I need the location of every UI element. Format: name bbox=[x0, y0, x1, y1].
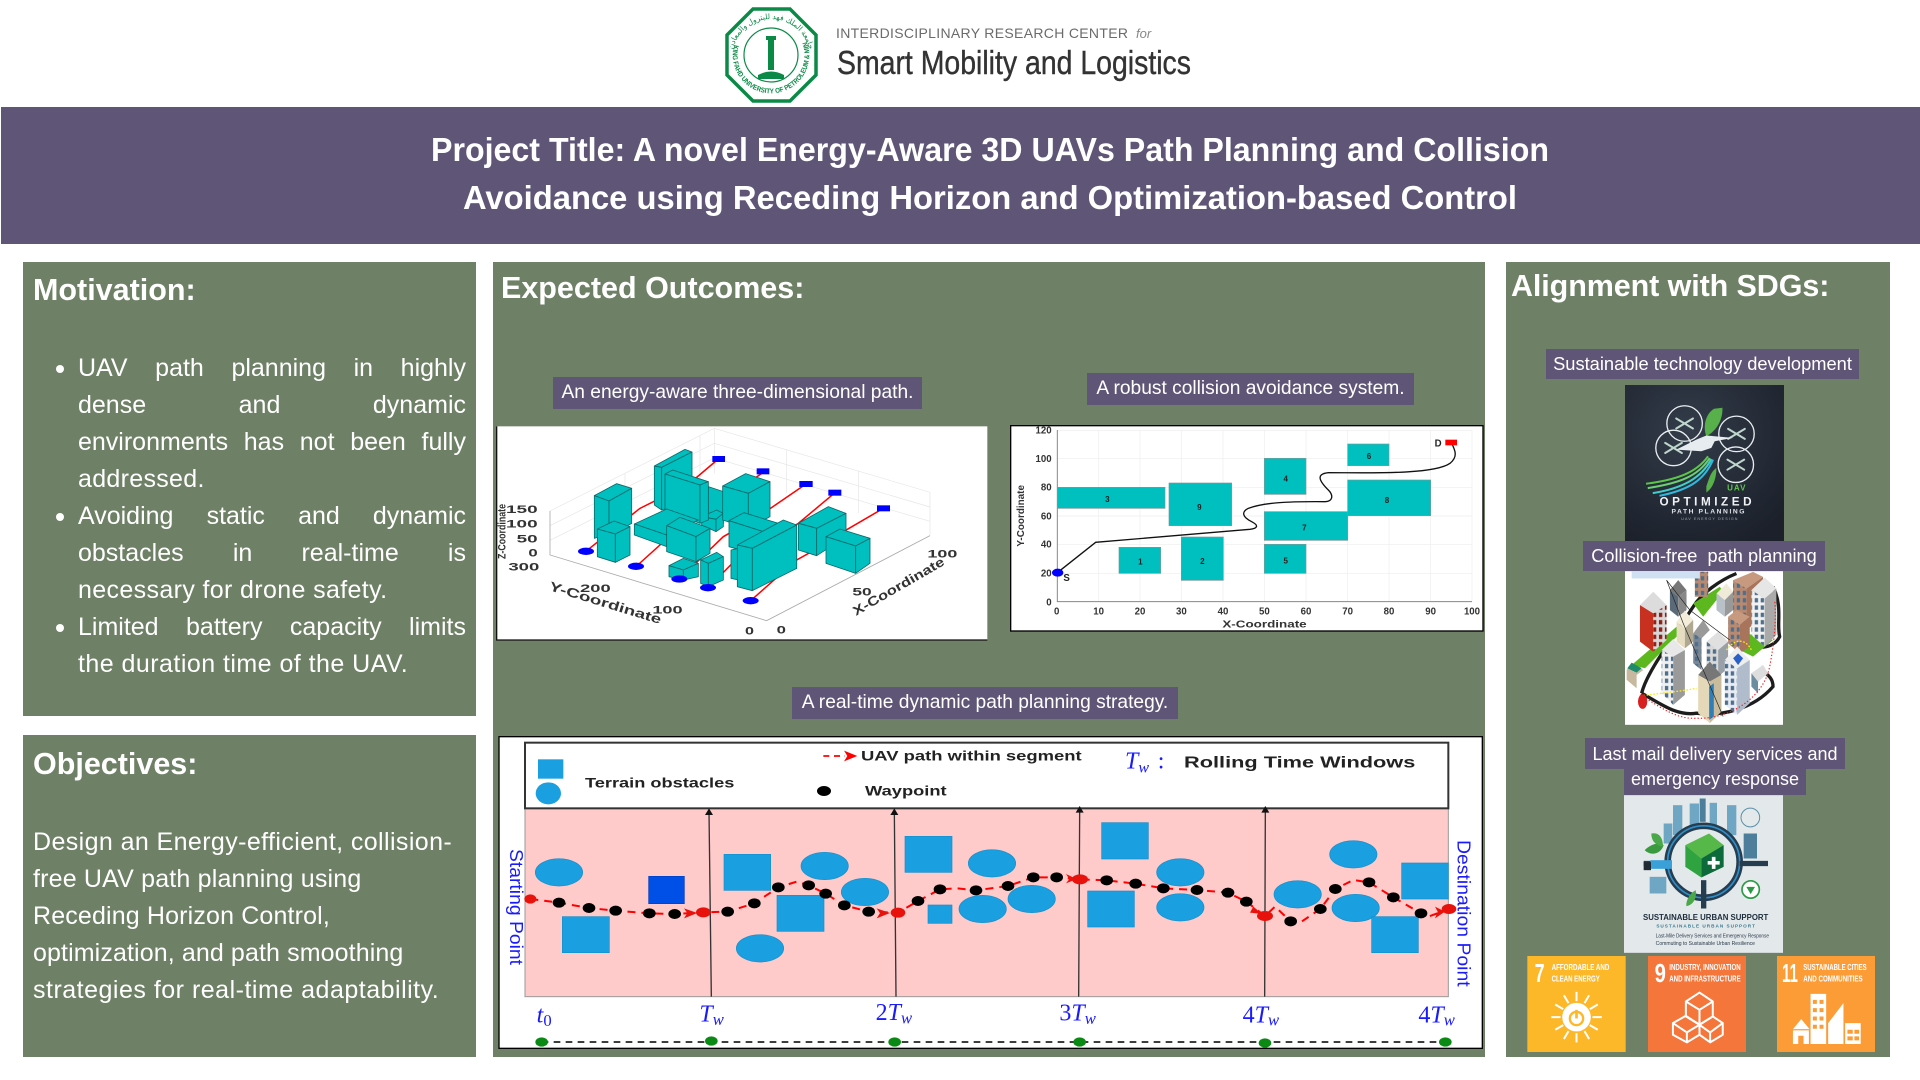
pink planning area bbox=[525, 808, 1448, 997]
bullet list: motivation: environments has not been fully bbox=[78, 428, 466, 456]
axis labels: 200 bbox=[580, 583, 611, 595]
SDG tile: 11 bbox=[1777, 956, 1875, 1052]
axis labels: 100 bbox=[506, 518, 538, 530]
panel: alignment with SDGs bbox=[1506, 262, 1890, 1057]
axis labels bbox=[496, 504, 957, 638]
bullet list: motivation: UAV path planning in highly bbox=[78, 354, 466, 382]
axis labels: 0 bbox=[777, 624, 786, 636]
image: drone logo: UAV ENERGY DESIGN bbox=[1681, 517, 1738, 521]
bullet list: motivation: obstacles in real-time is bbox=[78, 539, 466, 567]
chart: rolling time window strategy bbox=[498, 736, 1483, 1049]
chart: 2D collision avoidance: 9 bbox=[1197, 503, 1202, 512]
heading: expected outcomes: Expected Outcomes: bbox=[501, 271, 804, 305]
bullet list: motivation: the duration time of the UAV. bbox=[78, 650, 408, 678]
time labels: 4T bbox=[1243, 1002, 1268, 1028]
axis labels bbox=[1016, 426, 1480, 631]
time labels: w bbox=[901, 1008, 912, 1027]
axis labels: 100 bbox=[652, 604, 683, 616]
axis labels: Y-Coordinate bbox=[1016, 484, 1027, 547]
heading: SDGs: Alignment with SDGs: bbox=[1511, 269, 1829, 303]
axis labels: 20 bbox=[1041, 569, 1052, 580]
legend bbox=[525, 743, 1448, 808]
start marker bbox=[1052, 569, 1070, 584]
axis labels: 300 bbox=[508, 562, 539, 574]
axis labels: 80 bbox=[1041, 483, 1052, 494]
time labels: T bbox=[699, 1002, 713, 1028]
bullet list: motivation bbox=[56, 354, 466, 678]
UAV path bbox=[530, 877, 1449, 923]
chart: 2D collision avoidance: 5 bbox=[1283, 557, 1288, 566]
destination marker bbox=[1435, 438, 1457, 449]
image: city collision-free paths bbox=[1625, 571, 1783, 725]
chart: 2D collision avoidance: 8 bbox=[1385, 496, 1390, 505]
time labels: 3T bbox=[1059, 1001, 1085, 1027]
waypoints bbox=[553, 872, 1427, 926]
image: sustainable urban support logo: Last-Mile Delivery Services and Emergency Response bbox=[1656, 934, 1769, 940]
image: sustainable urban support logo bbox=[1624, 795, 1783, 953]
segment nodes bbox=[524, 874, 1456, 921]
pill: sustainable technology caption bbox=[1546, 349, 1859, 379]
text block: objectives: Receding Horizon Control, bbox=[33, 902, 330, 930]
time labels: 2T bbox=[876, 1000, 901, 1026]
axis labels: X-Coordinate bbox=[850, 554, 947, 619]
axis labels: 50 bbox=[852, 586, 872, 598]
time labels: 0 bbox=[543, 1011, 552, 1030]
text block: objectives bbox=[33, 828, 452, 1004]
legend: Terrain obstacles bbox=[585, 774, 735, 790]
logo: university seal bbox=[725, 7, 818, 103]
label: destination point: Destination Point bbox=[1453, 840, 1474, 988]
pill: energy-aware path caption: An energy-aware three-dimensional path. bbox=[562, 382, 913, 403]
axis labels: 0 bbox=[528, 548, 538, 560]
title banner: Avoidance using Receding Horizon and Optimization-based Control bbox=[463, 179, 1517, 216]
axis labels: 60 bbox=[1301, 607, 1311, 618]
axis labels: 50 bbox=[1259, 607, 1270, 618]
axis labels: X-Coordinate bbox=[1222, 620, 1308, 631]
chart: 2D collision avoidance: 2 bbox=[1200, 557, 1205, 566]
chart: 2D collision avoidance bbox=[1010, 425, 1484, 632]
bullet list: motivation: Limited battery capacity limits bbox=[78, 613, 466, 641]
axis labels: 100 bbox=[1464, 607, 1480, 618]
time labels: w bbox=[1085, 1009, 1096, 1028]
SDG tile: 7 bbox=[1527, 956, 1626, 1052]
SDG tile: 9: 9 bbox=[1655, 960, 1666, 988]
pill: sustainable technology caption: Sustainable technology development bbox=[1553, 353, 1852, 374]
image: drone logo: OPTIMIZED bbox=[1659, 496, 1752, 509]
start marker: S bbox=[1063, 573, 1070, 584]
chart: 2D collision avoidance: 7 bbox=[1302, 523, 1307, 532]
panel: expected outcomes bbox=[493, 262, 1485, 1057]
axis labels: 100 bbox=[927, 548, 957, 560]
chart: 2D collision avoidance: 6 bbox=[1367, 452, 1372, 461]
bullet list: motivation: dense and dynamic bbox=[78, 391, 466, 419]
text block: objectives: optimization, and path smoothing bbox=[33, 939, 403, 967]
chart: 3D UAV path bbox=[496, 426, 988, 641]
time labels bbox=[537, 1000, 1455, 1030]
logo text: centre name line 1: INTERDISCIPLINARY RESEARCH CENTER bbox=[836, 25, 1128, 41]
legend: Rolling Time Windows bbox=[1184, 754, 1415, 771]
pill: dynamic planning caption: A real-time dynamic path planning strategy. bbox=[802, 692, 1168, 713]
axis labels: 80 bbox=[1384, 607, 1394, 618]
pill: collision avoidance caption bbox=[1087, 373, 1414, 405]
chart: 2D collision avoidance: 4 bbox=[1283, 474, 1288, 483]
start and goal markers bbox=[578, 456, 890, 604]
pill: last mile caption bbox=[1585, 738, 1845, 769]
axis labels: Z-Coordinate bbox=[496, 504, 508, 559]
axis labels: 40 bbox=[1041, 540, 1052, 551]
pill: last mile caption second line: emergency response bbox=[1631, 769, 1799, 789]
image: sustainable urban support logo: SUSTAINABLE URBAN SUPPORT bbox=[1656, 924, 1755, 928]
legend: T bbox=[1125, 749, 1138, 775]
heading: motivation: Motivation: bbox=[33, 273, 196, 307]
panel: objectives bbox=[23, 735, 476, 1057]
label: starting point: Starting Point bbox=[506, 849, 527, 966]
axis labels: 150 bbox=[506, 504, 538, 516]
axis labels: 100 bbox=[1036, 454, 1052, 465]
axis labels: Y-Coordinate bbox=[547, 579, 663, 627]
SDG tile: 7: CLEAN ENERGY bbox=[1552, 974, 1600, 984]
heading: objectives: Objectives: bbox=[33, 747, 197, 781]
title banner: Project Title: A novel Energy-Aware 3D UAVs Path Planning and Collision bbox=[431, 131, 1549, 168]
timeline bbox=[535, 1036, 1452, 1048]
text block: objectives: strategies for real-time adaptability. bbox=[33, 976, 439, 1004]
text block: objectives: Design an Energy-efficient, collision- bbox=[33, 828, 452, 856]
axis labels: 0 bbox=[1046, 597, 1052, 608]
legend: : bbox=[1158, 749, 1164, 775]
collision-free path bbox=[1057, 443, 1455, 573]
panel: motivation bbox=[23, 262, 476, 716]
image: drone logo: PATH PLANNING bbox=[1672, 509, 1745, 516]
time labels: w bbox=[713, 1010, 724, 1029]
legend: UAV path within segment bbox=[861, 748, 1082, 764]
destination marker: D bbox=[1435, 438, 1442, 449]
image: drone logo bbox=[1625, 385, 1784, 541]
logo text: for: for bbox=[1136, 26, 1152, 41]
SDG tile: 7: 7 bbox=[1535, 960, 1545, 988]
pill: dynamic planning caption bbox=[792, 687, 1178, 719]
title banner bbox=[1, 107, 1920, 244]
axis labels: 60 bbox=[1041, 511, 1052, 522]
logo: university seal: جامعة الملك فهد للبترول والمعادن bbox=[730, 13, 813, 49]
buildings bbox=[1627, 572, 1776, 723]
image: drone logo: UAV bbox=[1727, 483, 1746, 492]
pill: collision-free caption bbox=[1583, 541, 1825, 571]
terrain obstacles bbox=[535, 823, 1448, 962]
legend: Waypoint bbox=[865, 783, 947, 799]
axis labels: 0 bbox=[745, 626, 754, 638]
bullet list: motivation: Avoiding static and dynamic bbox=[78, 502, 466, 530]
SDG tile: 9 bbox=[1648, 956, 1746, 1052]
axis labels: 50 bbox=[517, 533, 538, 545]
axis labels: 70 bbox=[1342, 607, 1353, 618]
SDG tile: 11: 11 bbox=[1782, 960, 1798, 988]
axis labels: 0 bbox=[1054, 607, 1059, 618]
chart: 2D collision avoidance: 1 bbox=[1138, 558, 1143, 567]
time labels: t bbox=[537, 1003, 543, 1029]
axis labels: 90 bbox=[1425, 607, 1436, 618]
axis labels: 120 bbox=[1036, 426, 1052, 437]
bullet list: motivation: addressed. bbox=[78, 465, 205, 493]
logo text: centre name line 2: Smart Mobility and Logistics bbox=[837, 44, 1191, 81]
legend: w bbox=[1138, 760, 1149, 777]
numbered obstacles bbox=[1057, 444, 1431, 580]
flight paths bbox=[587, 459, 883, 601]
axis labels: 20 bbox=[1135, 607, 1145, 618]
text block: objectives: free UAV path planning using bbox=[33, 865, 361, 893]
pill: last mile caption: Last mail delivery services and bbox=[1592, 744, 1838, 764]
axis labels: 30 bbox=[1176, 607, 1187, 618]
obstacles bbox=[594, 449, 870, 591]
pill: collision-free caption: Collision-free path planning bbox=[1591, 546, 1817, 566]
chart: 2D collision avoidance: 3 bbox=[1105, 495, 1110, 504]
axis labels: 10 bbox=[1093, 607, 1104, 618]
pill: energy-aware path caption bbox=[553, 377, 922, 409]
time labels: w bbox=[1444, 1011, 1455, 1030]
time labels: w bbox=[1268, 1011, 1279, 1030]
time labels: 4T bbox=[1418, 1002, 1444, 1028]
image: sustainable urban support logo: Commuting to Sustainable Urban Resilience bbox=[1656, 941, 1755, 947]
header: logo and centre name bbox=[725, 7, 1191, 103]
axis labels: 40 bbox=[1218, 607, 1228, 618]
image: sustainable urban support logo: SUSTAINABLE URBAN SUPPORT bbox=[1643, 913, 1768, 922]
bullet list: motivation: necessary for drone safety. bbox=[78, 576, 387, 604]
pill: collision avoidance caption: A robust collision avoidance system. bbox=[1096, 378, 1405, 399]
time window dividers bbox=[705, 806, 1269, 997]
